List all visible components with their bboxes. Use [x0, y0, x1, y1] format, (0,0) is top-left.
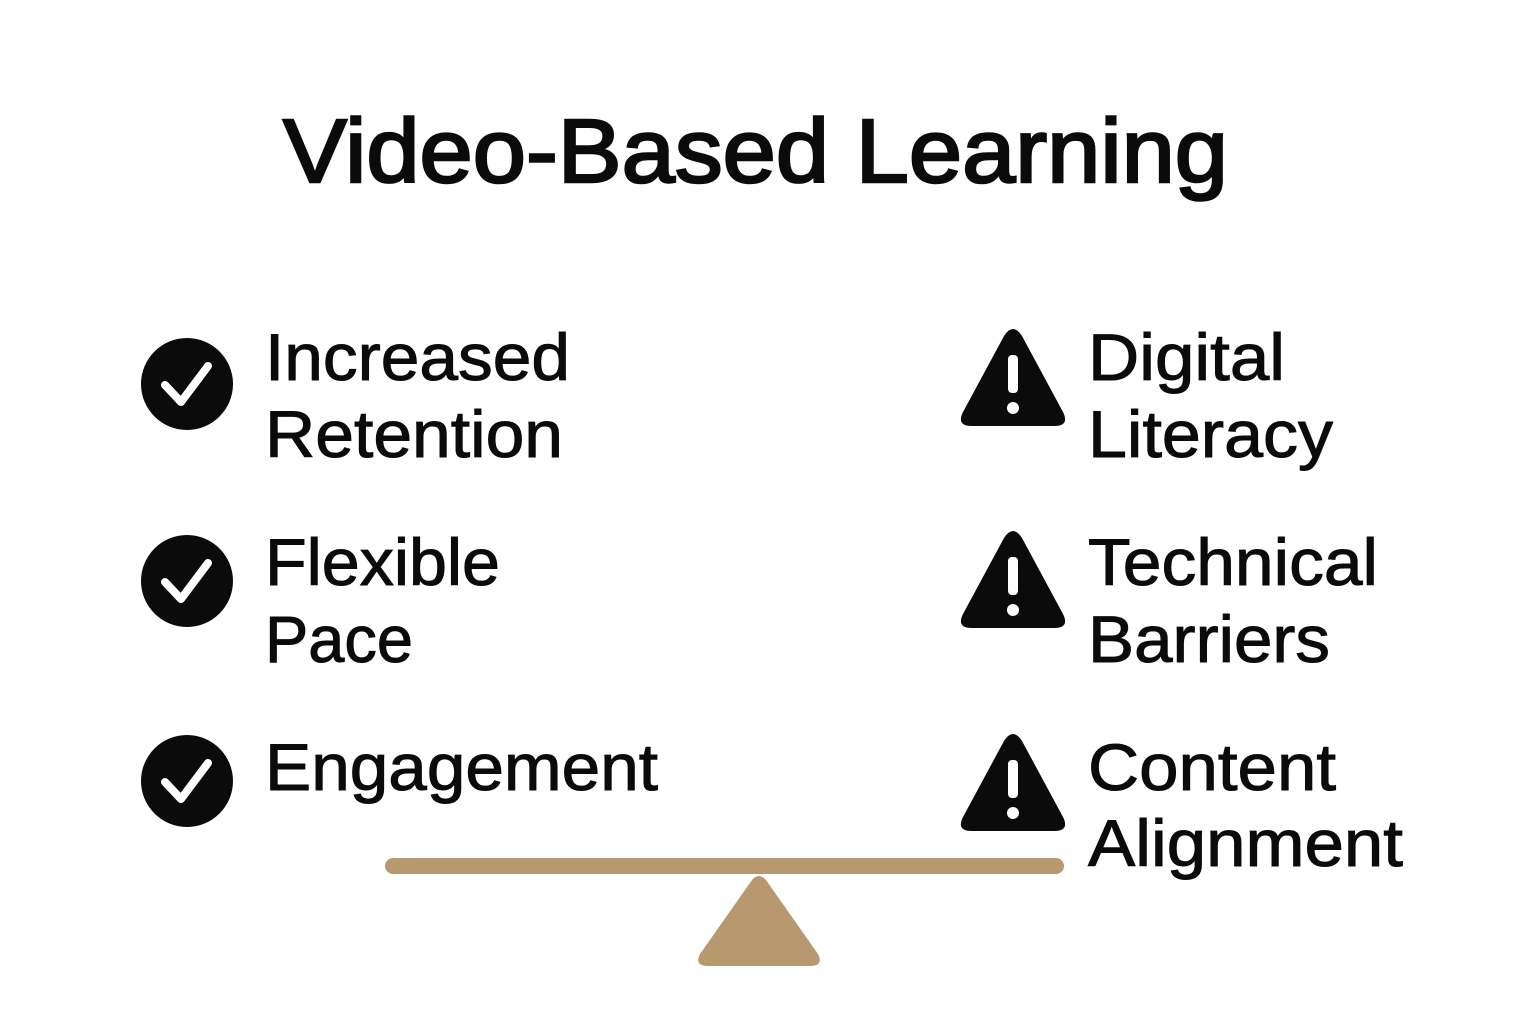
text: Technical Barriers: Technical [1088, 525, 1378, 599]
text: Content Alignment: Alignment [1088, 806, 1403, 880]
text: Digital Literacy: Literacy [1088, 397, 1333, 471]
icon: check 3 [141, 735, 233, 827]
text: Engagement: Engagement [265, 730, 658, 804]
icon: check 2 [141, 535, 233, 627]
panel: benefits [141, 320, 658, 827]
icon: check 1 [141, 338, 233, 430]
text: Flexible Pace [265, 525, 500, 676]
text: Increased Retention: Increased [265, 320, 570, 394]
text: Flexible Pace: Flexible [265, 525, 500, 599]
text: Digital Literacy: Digital [1088, 320, 1285, 394]
text: Content Alignment [1088, 730, 1403, 880]
text: Increased Retention [265, 320, 570, 471]
beam [393, 858, 1056, 874]
text: Technical Barriers: Barriers [1088, 602, 1330, 676]
text: Content Alignment: Content [1088, 730, 1336, 804]
panel: challenges [961, 320, 1403, 880]
balance scale [393, 866, 1056, 966]
text: Technical Barriers [1088, 525, 1378, 676]
text: Increased Retention: Retention [265, 397, 563, 471]
fulcrum [698, 876, 820, 966]
icon: warning 1 [961, 329, 1065, 426]
text: Digital Literacy [1088, 320, 1333, 471]
title: Video-Based Learning [283, 102, 1228, 202]
icon: warning 3 [961, 734, 1065, 831]
icon: warning 2 [961, 531, 1065, 628]
text: Flexible Pace: Pace [265, 602, 413, 676]
